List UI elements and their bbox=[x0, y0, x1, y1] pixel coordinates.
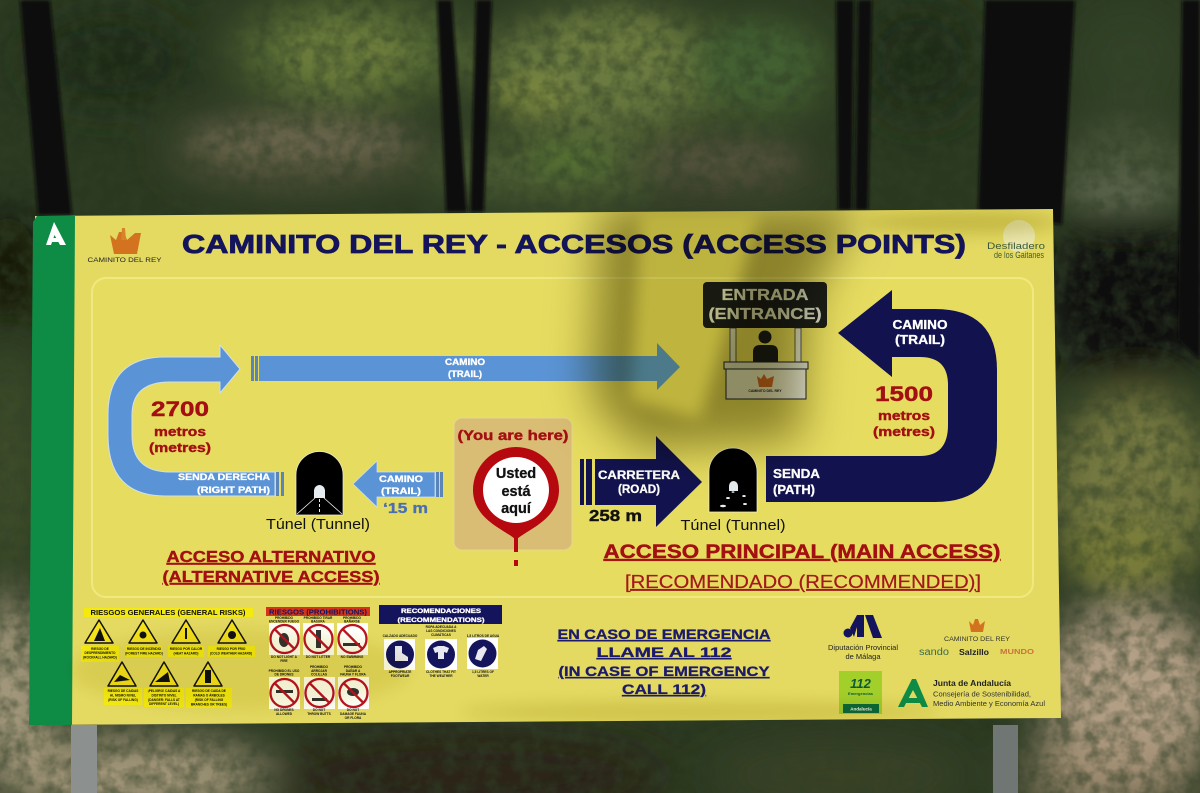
prohibition captions: DO NOT bbox=[347, 708, 359, 712]
recommendation captions bbox=[383, 625, 500, 678]
warning glyphs bbox=[94, 628, 236, 683]
logo: 112 emergencies bbox=[839, 671, 882, 714]
prohibition captions: PROHIBIDO bbox=[275, 616, 294, 620]
prohibition captions: OR FLORA bbox=[345, 716, 362, 720]
distance: 2700 metres: 2700 bbox=[151, 398, 209, 421]
icon: location pin: Usted bbox=[496, 466, 536, 482]
distance: 2700 metres: (metres) bbox=[149, 440, 211, 455]
arrow: light blue short trail bbox=[353, 461, 443, 507]
recommendation captions: 1,5 LITRES OF bbox=[472, 670, 494, 674]
logo: 112 emergencies: 112 bbox=[850, 676, 872, 691]
prohibition captions: PROHIBIDO bbox=[310, 665, 329, 669]
risk captions: (HEAT HAZARD) bbox=[174, 652, 198, 656]
logo: Diputacion de Malaga bbox=[828, 615, 898, 661]
prohibition captions: PROHIBIDO EL USO bbox=[269, 669, 300, 673]
icon: entrance booth: ENTRADA bbox=[722, 287, 809, 304]
panel: general risks: RIESGOS GENERALES (GENERAL RISKS) bbox=[90, 608, 246, 617]
logo: Junta de Andalucia bbox=[898, 678, 1045, 708]
risk captions: ¡PELIGRO! CAIDAS A bbox=[148, 689, 181, 693]
risk captions bbox=[81, 646, 255, 708]
prohibition captions: PROHIBIDO bbox=[344, 665, 363, 669]
emergency notice: CALL 112) bbox=[622, 681, 706, 697]
green band bbox=[29, 216, 75, 725]
emergency notice: EN CASO DE EMERGENCIA bbox=[558, 626, 770, 642]
logos: Caminito del Rey partners: sando bbox=[919, 647, 949, 658]
distance: 1500 metres: metros bbox=[878, 408, 930, 423]
risk captions: BRANCHES OR TREES) bbox=[191, 702, 227, 706]
board face bbox=[29, 209, 1061, 725]
prohibition signs bbox=[269, 623, 369, 709]
logo: Caminito del Rey: CAMINITO DEL REY bbox=[88, 257, 162, 264]
logos: Caminito del Rey partners: CAMINITO DEL REY bbox=[944, 636, 1010, 643]
risk captions: (RISK OF FALLING bbox=[195, 698, 224, 702]
risk captions: RIESGO DE CAIDA DE bbox=[192, 689, 226, 693]
arrow: navy road bbox=[580, 436, 702, 527]
risk captions: AL MISMO NIVEL bbox=[110, 694, 136, 698]
risk captions: RAMAS O ÁRBOLES bbox=[193, 692, 225, 698]
panel: you are here: (You are here) bbox=[458, 427, 568, 443]
prohibition captions: FIRE bbox=[280, 659, 288, 663]
panel: recommendations bbox=[379, 605, 502, 678]
logo: Junta de Andalucia: Medio Ambiente y Economía Azul bbox=[933, 699, 1045, 708]
label: right tunnel: Túnel (Tunnel) bbox=[680, 518, 786, 534]
prohibition captions: THROW BUTTS bbox=[307, 712, 331, 716]
panel: you are here bbox=[454, 418, 572, 566]
risk captions: DISTINTO NIVEL bbox=[151, 694, 177, 698]
arrow: light blue straight trail bbox=[251, 343, 680, 390]
icon: Andalucia A bbox=[46, 222, 66, 245]
prohibition captions: NO SWIMMING bbox=[341, 655, 364, 659]
arrow: light blue U-turn: (RIGHT PATH) bbox=[197, 485, 270, 495]
recommendation captions: APPROPRIATE bbox=[389, 670, 411, 674]
logo: Diputacion de Malaga: de Málaga bbox=[845, 652, 881, 661]
logo: Desfiladero de los Gaitanes bbox=[987, 220, 1045, 260]
arrow: navy U-turn: SENDA bbox=[773, 467, 820, 481]
distance: 15 m: ‘15 m bbox=[383, 500, 428, 517]
access title: alternative: ACCESO ALTERNATIVO bbox=[166, 549, 376, 566]
arrow: light blue U-turn bbox=[108, 345, 284, 496]
prohibition captions: DO NOT LIGHT A bbox=[271, 655, 298, 659]
row of warning triangles 1 bbox=[85, 620, 246, 686]
prohibition captions: PROHIBIDO TIRAR bbox=[304, 616, 333, 620]
prohibition captions: NO DRONES bbox=[274, 708, 294, 712]
logo: Junta de Andalucia: Junta de Andalucía bbox=[933, 678, 1011, 688]
arrow: navy road: CARRETERA bbox=[598, 470, 680, 482]
access title: main: ACCESO PRINCIPAL (MAIN ACCESS) bbox=[604, 542, 1000, 563]
prohibition captions: DE DRONES bbox=[275, 672, 293, 676]
logo: Junta de Andalucia: Consejería de Sostenibilidad, bbox=[933, 690, 1031, 698]
prohibition captions: DO NOT bbox=[313, 708, 325, 712]
prohibition captions: DO NOT LITTER bbox=[306, 655, 331, 659]
risk captions: RIESGO POR CALOR bbox=[170, 647, 203, 651]
distance: 1500 metres: (metres) bbox=[873, 424, 935, 439]
access title: alternative bbox=[162, 549, 380, 586]
logo: Diputacion de Malaga: Diputación Provincial bbox=[828, 643, 898, 652]
emergency notice bbox=[558, 626, 770, 697]
arrow: navy U-turn: CAMINO bbox=[892, 318, 948, 332]
recommendation captions: CLOTHES THAT FIT bbox=[426, 670, 456, 674]
arrow: light blue U-turn: SENDA DERECHA bbox=[178, 472, 271, 482]
arrow: navy road: (ROAD) bbox=[618, 484, 660, 496]
panel: access map bbox=[92, 278, 1033, 597]
risk captions: (COLD WEATHER HAZARD) bbox=[210, 652, 252, 656]
prohibition captions: PROHIBIDO bbox=[343, 616, 362, 620]
signboard bbox=[29, 205, 1061, 725]
icon: entrance booth: CAMINITO DEL REY bbox=[748, 389, 782, 393]
recommendation icons bbox=[384, 638, 498, 670]
icon: location pin: aquí bbox=[501, 501, 532, 517]
prohibition captions bbox=[269, 616, 367, 720]
recommendation captions: 1,5 LITROS DE AGUA bbox=[467, 634, 500, 638]
access title: main bbox=[604, 542, 1000, 592]
recommendation captions: ROPA ADECUADA A bbox=[426, 625, 457, 629]
distance: 1500 metres bbox=[873, 383, 935, 439]
arrow: light blue straight trail: CAMINO bbox=[445, 357, 485, 367]
panel: prohibitions bbox=[266, 607, 370, 720]
panel: general risks bbox=[81, 608, 255, 708]
recommendation captions: THE WEATHER bbox=[429, 674, 453, 678]
logo: Desfiladero de los Gaitanes: de los Gaitanes bbox=[994, 250, 1044, 260]
prohibition captions: ARROJAR bbox=[311, 669, 328, 673]
access title: main: [RECOMENDADO (RECOMMENDED)] bbox=[625, 572, 981, 592]
panel: recommendations: RECOMENDACIONES bbox=[401, 608, 482, 615]
risk captions: DIFFERENT LEVEL) bbox=[149, 702, 179, 706]
logo: 112 emergencies: Andalucía bbox=[850, 706, 872, 712]
prohibition captions: FAUNA Y FLORA bbox=[340, 672, 367, 676]
risk captions: (ROCKFALL HAZARD) bbox=[83, 656, 117, 660]
label: left tunnel: Túnel (Tunnel) bbox=[266, 517, 370, 533]
title: CAMINITO DEL REY - ACCESOS (ACCESS POINTS) bbox=[182, 229, 966, 259]
icon: left tunnel bbox=[296, 451, 343, 515]
risk captions: DESPRENDIMIENTO bbox=[85, 651, 116, 655]
prohibition captions: DAMAGE FAUNA bbox=[340, 712, 367, 716]
recommendation captions: CALZADO ADECUADO bbox=[383, 634, 418, 638]
distance: 258 m: 258 m bbox=[589, 508, 642, 525]
arrow: light blue straight trail: (TRAIL) bbox=[448, 369, 482, 379]
logos: Caminito del Rey partners bbox=[919, 619, 1035, 658]
prohibition captions: DAÑAR A bbox=[346, 668, 361, 673]
arrow: navy U-turn: (TRAIL) bbox=[895, 333, 945, 347]
logo: Desfiladero de los Gaitanes: Desfiladero bbox=[987, 241, 1045, 251]
arrow: navy U-turn bbox=[766, 290, 997, 502]
icon: entrance booth bbox=[703, 282, 827, 399]
prohibition captions: COLILLAS bbox=[311, 672, 327, 676]
icon: entrance booth: (ENTRANCE) bbox=[708, 306, 822, 323]
recommendation captions: LAS CONDICIONES bbox=[426, 629, 456, 633]
distance: 2700 metres bbox=[149, 398, 211, 455]
logos: Caminito del Rey partners: MUNDO bbox=[1000, 649, 1035, 656]
distance: 2700 metres: metros bbox=[154, 424, 206, 439]
tree shadow over board bbox=[70, 205, 1060, 722]
risk captions: RIESGO DE bbox=[91, 647, 109, 651]
arrow: navy U-turn: (PATH) bbox=[773, 483, 815, 497]
risk captions: RIESGO DE INCENDIO bbox=[127, 647, 162, 651]
icon: location pin bbox=[473, 447, 559, 566]
icon: right tunnel bbox=[709, 448, 757, 512]
risk captions: RIESGO DE CAIDAS bbox=[108, 689, 138, 693]
recommendation captions: WATER bbox=[477, 674, 489, 678]
distance: 1500 metres: 1500 bbox=[875, 383, 933, 406]
icon: location pin: está bbox=[501, 484, 531, 500]
emergency notice: LLAME AL 112 bbox=[596, 644, 732, 660]
risk captions: (RISK OF FALLING) bbox=[108, 698, 138, 702]
emergency notice: (IN CASE OF EMERGENCY bbox=[558, 663, 770, 679]
prohibition captions: BAÑARSE bbox=[344, 618, 360, 624]
logo: Caminito del Rey bbox=[88, 228, 162, 264]
access title: alternative: (ALTERNATIVE ACCESS) bbox=[162, 569, 380, 586]
panel: recommendations: (RECOMMENDATIONS) bbox=[398, 617, 484, 624]
risk captions: (FOREST FIRE HAZARD) bbox=[125, 652, 163, 656]
risk captions: (DANGER: FALLS AT bbox=[148, 698, 180, 702]
recommendation captions: CLIMÁTICAS bbox=[431, 632, 451, 637]
prohibition captions: ENCENDER FUEGO bbox=[269, 620, 300, 624]
arrow: light blue short trail: CAMINO bbox=[379, 474, 423, 485]
risk captions: RIESGO POR FRIO bbox=[217, 647, 246, 651]
panel: prohibitions: RIESGOS (PROHIBITIONS) bbox=[269, 608, 368, 616]
arrow: light blue short trail: (TRAIL) bbox=[381, 486, 421, 497]
recommendation captions: FOOTWEAR bbox=[391, 674, 410, 678]
prohibition captions: ALLOWED bbox=[276, 712, 293, 716]
logos: Caminito del Rey partners: Salzillo bbox=[959, 647, 989, 657]
logo: 112 emergencies: Emergencias bbox=[848, 691, 874, 696]
sign posts bbox=[71, 725, 1018, 793]
prohibition captions: BASURA bbox=[311, 620, 326, 624]
